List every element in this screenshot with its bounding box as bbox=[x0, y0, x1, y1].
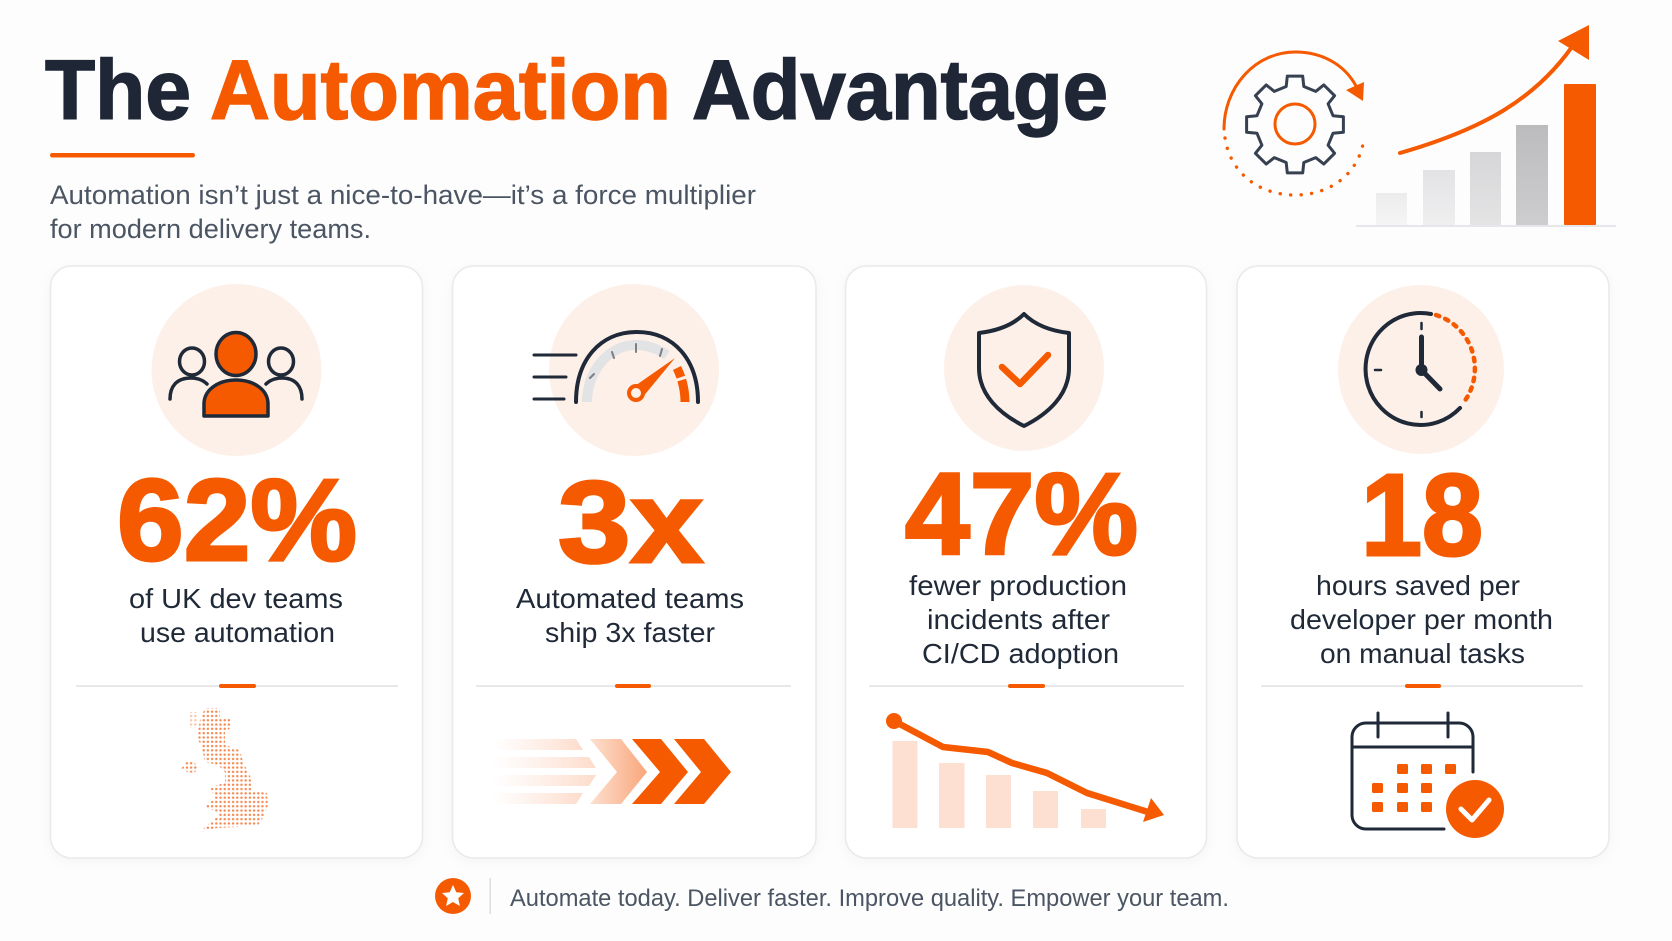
panel: UK dev teams bbox=[50, 266, 422, 858]
panel: hours saved bbox=[1237, 266, 1609, 858]
title: Automation bbox=[210, 43, 671, 137]
icon: shield bbox=[944, 285, 1104, 451]
caption: CI/CD adoption bbox=[922, 638, 1119, 669]
chart: declining incidents bbox=[886, 713, 1164, 828]
caption: on manual tasks bbox=[1320, 638, 1525, 669]
caption: incidents after bbox=[927, 604, 1110, 635]
title bbox=[45, 43, 1108, 137]
stat: 18: 18 bbox=[1361, 450, 1483, 580]
caption bbox=[516, 583, 744, 648]
panel: fewer incidents bbox=[846, 266, 1206, 858]
caption: hours saved per bbox=[1316, 570, 1520, 601]
stat: 47%: 47% bbox=[905, 449, 1138, 579]
icon: team bbox=[152, 284, 322, 456]
subtitle bbox=[50, 180, 756, 244]
caption: of UK dev teams bbox=[129, 583, 343, 614]
caption: developer per month bbox=[1290, 604, 1553, 635]
title underline bbox=[50, 153, 195, 158]
caption: use automation bbox=[140, 617, 335, 648]
icon: speedometer bbox=[534, 284, 719, 456]
stat: 3x: 3x bbox=[558, 457, 703, 587]
subtitle: Automation isn’t just a nice-to-have—it’s a force multiplier bbox=[50, 180, 756, 210]
chart: rising bars with arrow bbox=[1356, 25, 1616, 226]
caption: Automated teams bbox=[516, 583, 744, 614]
icon: clock bbox=[1338, 285, 1504, 454]
icon: rotating gear bbox=[1224, 52, 1364, 195]
caption: fewer production bbox=[909, 570, 1127, 601]
icon: calendar with check bbox=[1352, 713, 1504, 838]
subtitle: for modern delivery teams. bbox=[50, 214, 371, 244]
graphic: speed chevrons bbox=[493, 739, 731, 804]
footer tagline: Automate today. Deliver faster. Improve quality. Empower your team. bbox=[510, 885, 1229, 912]
panel: ship faster bbox=[452, 266, 816, 858]
caption bbox=[909, 570, 1127, 669]
title: Advantage bbox=[692, 43, 1108, 137]
caption bbox=[129, 583, 343, 648]
title: The bbox=[45, 43, 191, 137]
footer: star badge bbox=[435, 878, 471, 914]
caption bbox=[1290, 570, 1553, 669]
caption: ship 3x faster bbox=[545, 617, 715, 648]
stat: 62%: 62% bbox=[117, 455, 357, 585]
graphic: UK dot map bbox=[180, 708, 268, 832]
